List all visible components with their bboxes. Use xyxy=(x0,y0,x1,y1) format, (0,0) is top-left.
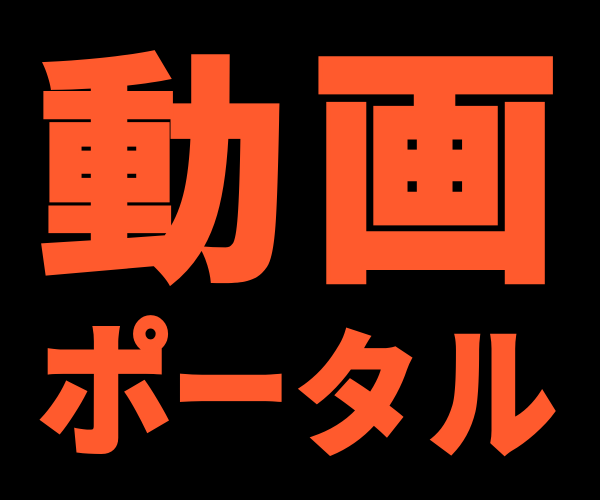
subtitle: ポータル: ー xyxy=(171,319,291,467)
title: 動画: 画 xyxy=(309,32,562,312)
subtitle: ポータル: ポ xyxy=(38,313,173,474)
title: 動画: 動 xyxy=(37,39,289,310)
subtitle: ポータル xyxy=(38,313,557,476)
subtitle: ポータル: ル xyxy=(429,317,557,476)
subtitle: ポータル: タ xyxy=(295,322,421,473)
title: 動画 xyxy=(37,32,562,312)
